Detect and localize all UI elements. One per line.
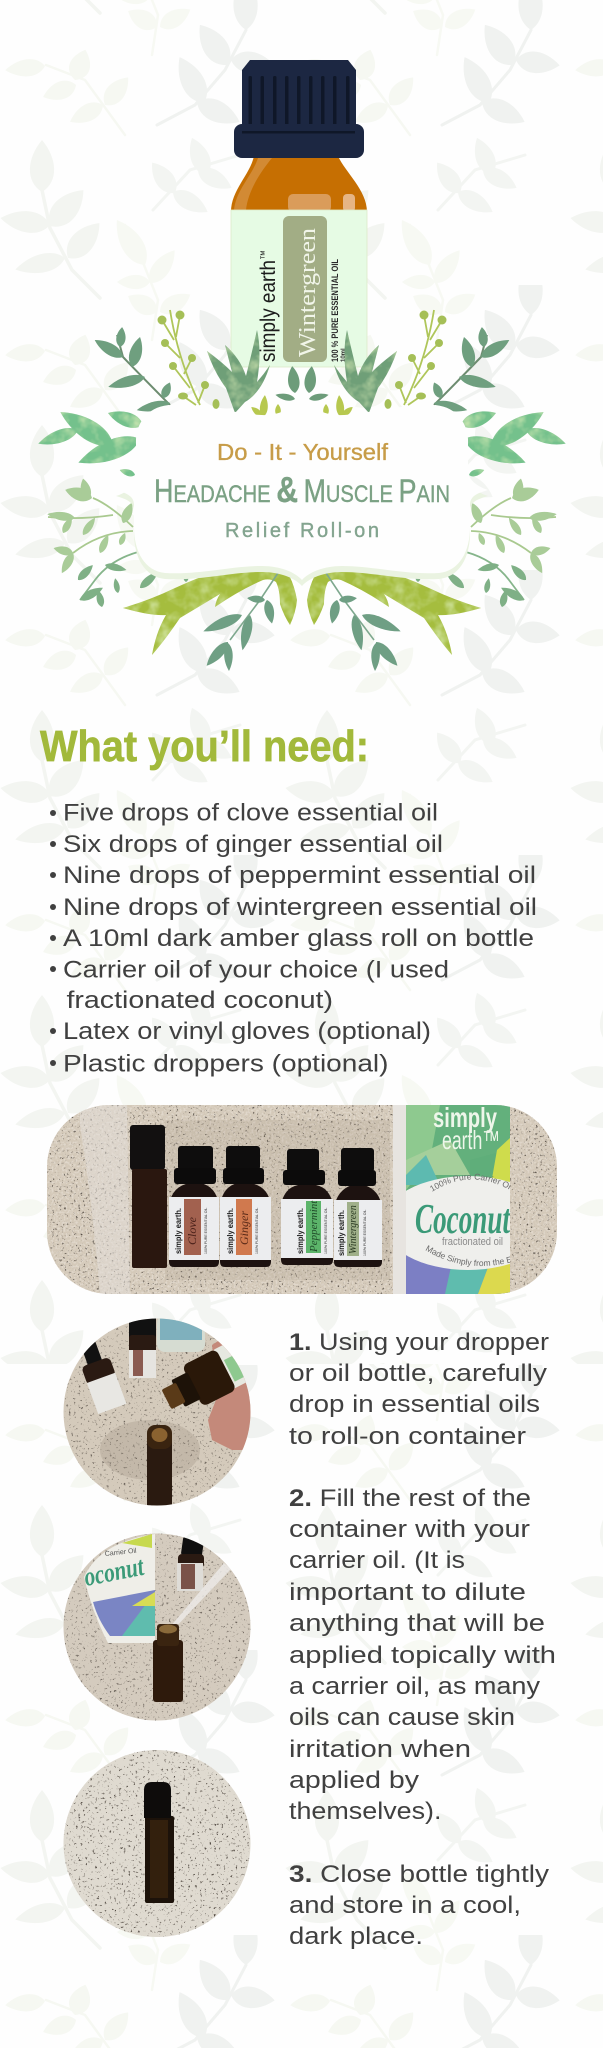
coconut bottle: oconut xyxy=(81,1551,147,1592)
illustration: essential oil bottle xyxy=(231,60,367,367)
step 3: and store in a cool, xyxy=(289,1892,521,1919)
small bottle xyxy=(177,1537,204,1591)
step 1: 1. Using your dropper xyxy=(289,1329,549,1356)
granite counter xyxy=(60,1530,255,1725)
headline: HEADACHE & MUSCLE PAIN xyxy=(154,469,450,510)
step 2: applied topically with xyxy=(289,1642,556,1669)
subtitle: do it yourself: Do - It - Yourself xyxy=(217,439,389,465)
coconut carrier oil bottle: simply xyxy=(433,1102,497,1133)
step 2: applied by xyxy=(289,1767,420,1794)
step 2: important to dilute xyxy=(289,1579,526,1606)
plastic dropper xyxy=(172,1563,230,1624)
bottle cap xyxy=(234,60,364,158)
step 3: dark place. xyxy=(289,1923,423,1950)
bottle label: 10ml xyxy=(341,348,347,362)
lower pale sprigs xyxy=(47,477,136,575)
ginger bottle: Ginger xyxy=(237,1211,251,1245)
clove bottle: Clove xyxy=(185,1216,199,1245)
roll-on bottle xyxy=(130,1125,167,1268)
bottle label: ™ xyxy=(259,250,271,260)
item: carrier oil: Carrier oil of your choice (I used xyxy=(63,956,449,984)
small leaves at centre xyxy=(249,366,301,418)
step 2: anything that will be xyxy=(289,1610,545,1637)
open roll-on vial xyxy=(147,1425,172,1512)
hand xyxy=(208,1341,250,1450)
clove bottle: 100% PURE ESSENTIAL OIL xyxy=(204,1208,208,1254)
photo: closed roll-on bottle xyxy=(60,1745,255,1940)
clove bottle xyxy=(169,1146,219,1267)
step instructions xyxy=(289,1329,556,1950)
branch: sage leaves xyxy=(92,327,174,415)
large sage leaf cluster xyxy=(207,330,270,413)
item: ginger: Six drops of ginger essential oil xyxy=(63,831,443,858)
granite counter xyxy=(47,1105,557,1294)
step 3: 3. Close bottle tightly xyxy=(289,1861,550,1888)
coconut bottle xyxy=(81,1534,155,1643)
small bottle with label xyxy=(129,1315,156,1378)
peppermint bottle xyxy=(281,1149,333,1265)
carrier bottle base xyxy=(157,1315,205,1352)
photo: dropping oils into container xyxy=(64,1318,250,1506)
bottle label xyxy=(231,210,367,367)
peppermint bottle: Peppermint xyxy=(308,1200,320,1253)
coconut carrier oil bottle: fractionated oil xyxy=(442,1236,503,1248)
ginger bottle: 100% PURE ESSENTIAL OIL xyxy=(255,1208,259,1254)
step 3 xyxy=(289,1861,550,1950)
tilted bottle with white label xyxy=(82,1342,126,1414)
photo: filling with carrier oil xyxy=(60,1530,255,1725)
step 2: a carrier oil, as many xyxy=(289,1673,541,1700)
sage sprig over ribbon xyxy=(201,573,278,671)
wintergreen bottle: Wintergreen xyxy=(348,1205,359,1254)
yellow-green ribbon leaf xyxy=(123,560,297,655)
item: roll-on bottle: A 10ml dark amber glass roll on bottle xyxy=(63,925,534,952)
item: wintergreen: Nine drops of wintergreen essential oil xyxy=(63,894,537,921)
pouring amber bottle xyxy=(162,1345,246,1409)
subtitle: relief roll-on: Relief Roll-on xyxy=(225,520,379,542)
item: gloves: Latex or vinyl gloves (optional) xyxy=(63,1018,431,1045)
item: peppermint: Nine drops of peppermint essential oil xyxy=(63,862,536,889)
peppermint bottle: simply earth. xyxy=(295,1208,305,1254)
step 2 xyxy=(289,1485,556,1825)
plastic dropper bag xyxy=(80,1105,130,1294)
bottle label: 100 % PURE ESSENTIAL OIL xyxy=(330,259,340,362)
peppermint bottle: 100% PURE ESSENTIAL OIL xyxy=(324,1208,328,1254)
granite counter xyxy=(60,1315,255,1510)
branch: berries xyxy=(158,310,220,409)
step 1: or oil bottle, carefully xyxy=(289,1360,548,1387)
step 2: themselves). xyxy=(289,1798,442,1825)
step 2: carrier oil. (It is xyxy=(289,1547,465,1574)
floral wreath xyxy=(36,310,568,671)
wintergreen bottle: simply earth. xyxy=(336,1210,346,1256)
coconut carrier oil bottle: Coconut xyxy=(415,1197,511,1243)
ginger bottle xyxy=(220,1146,271,1267)
step 2: irritation when xyxy=(289,1736,471,1763)
item: carrier oil: fractionated coconut) xyxy=(66,987,333,1014)
ginger bottle: simply earth. xyxy=(225,1208,235,1254)
granite counter xyxy=(60,1745,255,1940)
coconut carrier oil bottle: Made Simply from the Earth xyxy=(426,1245,510,1267)
coconut bottle: Carrier Oil xyxy=(104,1548,137,1558)
wintergreen bottle xyxy=(334,1148,382,1267)
item: droppers: Plastic droppers (optional) xyxy=(63,1050,388,1078)
open vial xyxy=(153,1624,183,1702)
lower green sprig xyxy=(75,552,218,608)
item: clove: Five drops of clove essential oil xyxy=(63,800,438,826)
coconut carrier oil bottle xyxy=(393,1105,510,1294)
bottle shoulder xyxy=(231,156,367,212)
bright green leaves xyxy=(36,404,145,478)
step 2: container with your xyxy=(289,1516,530,1543)
roll-on bottle xyxy=(144,1782,174,1903)
step 1 xyxy=(289,1329,549,1450)
step 2: 2. Fill the rest of the xyxy=(289,1485,531,1512)
coconut carrier oil bottle: 100% Pure Carrier Oil xyxy=(430,1174,510,1192)
coconut carrier oil bottle: earth™ xyxy=(442,1125,500,1155)
photo: supplies on counter xyxy=(47,1105,557,1294)
title banner xyxy=(116,394,488,586)
step 1: drop in essential oils xyxy=(289,1391,540,1418)
step 1: to roll-on container xyxy=(289,1423,526,1450)
bottle label: simply earth xyxy=(257,249,280,362)
heading: what you'll need: What you’ll need: xyxy=(40,722,369,771)
item: carrier oil xyxy=(50,956,449,1014)
banner plaque xyxy=(116,394,488,586)
ingredient list xyxy=(50,800,537,1078)
wintergreen bottle: 100% PURE ESSENTIAL OIL xyxy=(363,1210,367,1256)
clove bottle: simply earth. xyxy=(173,1208,183,1254)
bottle label: Wintergreen xyxy=(295,228,321,357)
step 2: oils can cause skin xyxy=(289,1704,515,1731)
